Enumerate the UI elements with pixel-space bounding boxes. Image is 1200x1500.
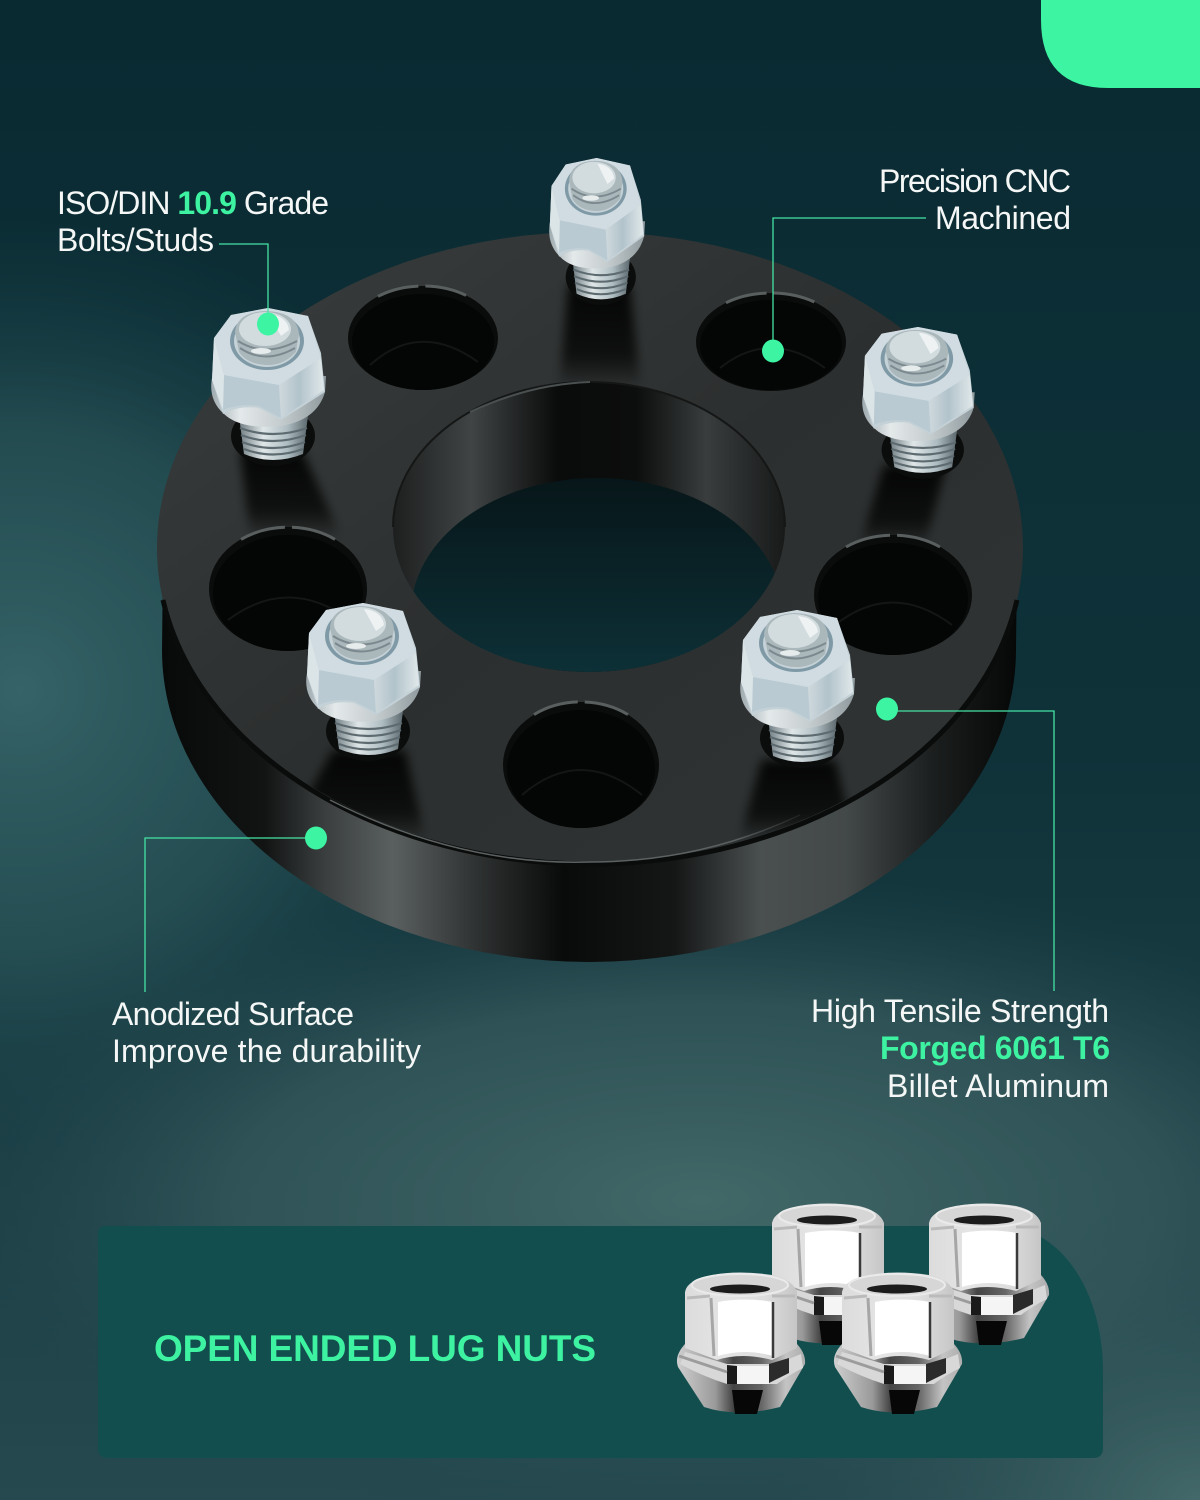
- callout: tensile strength: Billet Aluminum: [887, 1068, 1109, 1104]
- centre bore: [392, 381, 786, 672]
- panel background: [98, 1226, 1103, 1458]
- label text: ISO/DIN 10.9 Grade: [57, 185, 329, 221]
- leader line: [887, 711, 1054, 991]
- leader line: [145, 838, 316, 992]
- leader line: [219, 244, 268, 323]
- reflections of studs on face: [240, 285, 946, 838]
- corner tab: [1041, 0, 1200, 88]
- marker dot: [305, 826, 327, 850]
- callout: anodized: [112, 826, 421, 1069]
- callout: CNC: [762, 163, 1071, 362]
- label text: High Tensile Strength: [811, 993, 1109, 1029]
- callout: anodized: Improve the durability: [112, 1033, 421, 1069]
- label text: Precision CNC: [879, 163, 1071, 199]
- wheel spacer disc: [157, 158, 1023, 962]
- callout: bolts/studs: Bolts/Studs: [57, 222, 214, 258]
- lug nuts: [677, 1204, 1049, 1414]
- studs: [211, 158, 975, 768]
- callout: tensile strength: Forged 6061 T6: [880, 1030, 1110, 1066]
- leader line: [773, 218, 926, 351]
- label text: Anodized Surface: [112, 996, 354, 1032]
- callout: CNC: Machined: [935, 200, 1071, 236]
- callout: tensile strength: [811, 698, 1110, 1104]
- marker dot: [876, 698, 898, 720]
- disc side wall: [162, 560, 1017, 962]
- bolt holes: [209, 286, 972, 828]
- marker dot: [762, 340, 784, 362]
- panel: open ended lug nuts: [98, 1204, 1103, 1458]
- panel heading: OPEN ENDED LUG NUTS: [154, 1328, 596, 1369]
- marker dot: [257, 312, 279, 336]
- disc top face: [157, 232, 1023, 864]
- callout: bolts/studs: [57, 185, 329, 336]
